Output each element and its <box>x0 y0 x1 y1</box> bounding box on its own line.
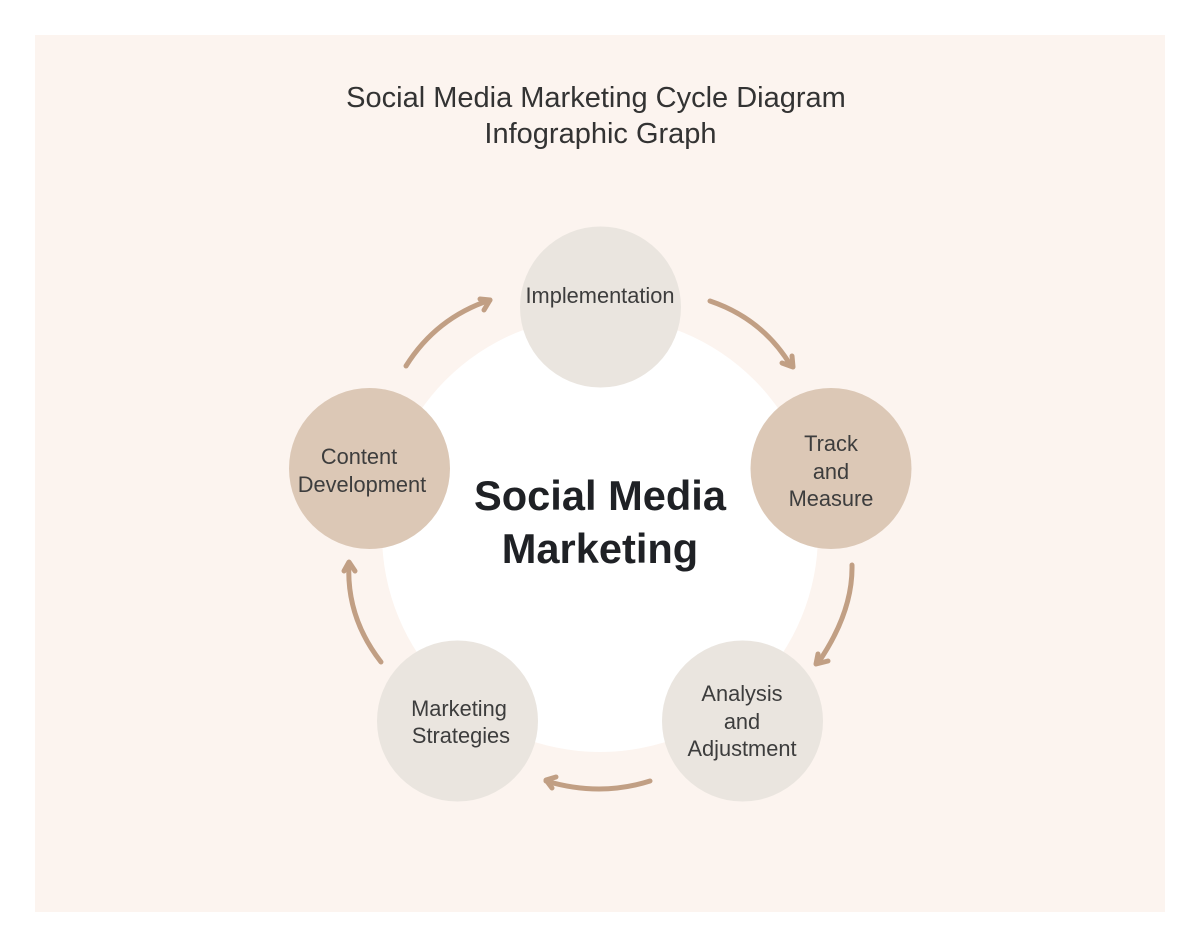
center heading: Marketing <box>502 525 698 572</box>
arrow: Marketing to Content <box>344 562 381 662</box>
node: Track and Measure: Track <box>804 431 858 456</box>
node: Analysis and Adjustment: and <box>724 709 760 734</box>
node: Track and Measure: and <box>813 459 849 484</box>
node: Marketing Strategies: Marketing <box>411 696 507 721</box>
arrow: Analysis to Marketing <box>546 777 650 789</box>
title <box>346 82 846 150</box>
center white circle <box>382 316 818 752</box>
node: Content Development: Development <box>298 472 426 497</box>
node: Implementation <box>520 226 681 388</box>
node: Implementation: Implementation <box>525 283 675 308</box>
title: Infographic Graph <box>484 118 717 150</box>
node: Analysis and Adjustment: Analysis <box>701 681 783 706</box>
node: Track and Measure <box>750 388 912 549</box>
title: Social Media Marketing Cycle Diagram <box>346 82 846 114</box>
arrow: Content to Implementation <box>406 299 490 366</box>
node: Analysis and Adjustment <box>662 640 823 802</box>
center heading: Social Media <box>474 472 727 519</box>
center heading <box>474 472 727 572</box>
node: Track and Measure: Measure <box>789 486 873 511</box>
node: Content Development <box>289 388 450 549</box>
node: Content Development: Content <box>321 444 397 469</box>
arrow: Implementation to Track <box>710 301 793 367</box>
node: Analysis and Adjustment: Adjustment <box>687 736 797 761</box>
node: Marketing Strategies <box>377 640 538 802</box>
node: Marketing Strategies: Strategies <box>412 723 510 748</box>
arrow: Track to Analysis <box>816 565 852 664</box>
